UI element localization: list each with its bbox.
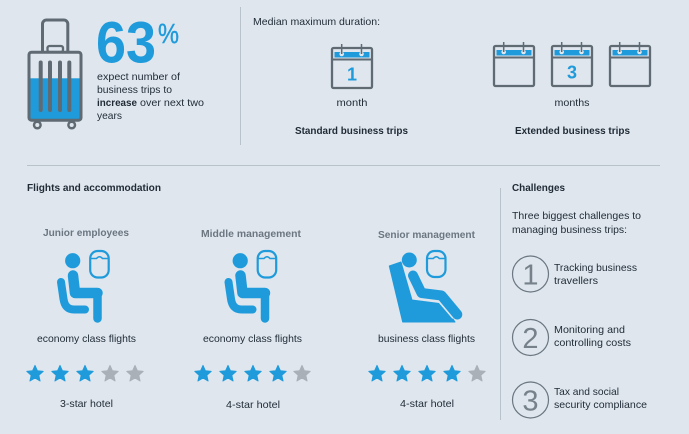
challenges heading: Challenges: [512, 182, 565, 194]
standard duration label: month: [336, 97, 368, 109]
challenge 1: Tracking business: [554, 262, 637, 274]
challenge 2: 2: [522, 323, 539, 355]
challenge 1: [512, 256, 637, 292]
statistic description: years: [97, 110, 122, 122]
challenge 2: controlling costs: [554, 337, 631, 349]
extended trips: calendars and labels: [494, 42, 650, 137]
challenge 2: Monitoring and: [554, 324, 625, 336]
senior flight class: business class flights: [378, 333, 475, 345]
junior flight class: economy class flights: [37, 333, 136, 345]
icon: business seat: [389, 251, 457, 322]
statistic description: over next two: [140, 97, 204, 109]
middle flight class: economy class flights: [203, 333, 302, 345]
challenges intro: managing business trips:: [512, 224, 627, 236]
extended duration label: months: [554, 97, 590, 109]
icon: economy seat: [61, 251, 109, 318]
column: senior management: [369, 229, 485, 410]
challenge 3: 3: [522, 386, 539, 418]
rating: three stars: [27, 365, 143, 381]
statistic description: increase: [97, 97, 137, 109]
duration heading: Median maximum duration:: [253, 16, 380, 28]
challenges intro: Three biggest challenges to: [512, 210, 641, 222]
junior hotel: 3-star hotel: [60, 398, 113, 410]
panel: median maximum duration: [253, 16, 650, 137]
standard trips label: Standard business trips: [295, 125, 408, 137]
middle hotel: 4-star hotel: [226, 399, 280, 411]
extended trips label: Extended business trips: [515, 125, 630, 137]
panel: 63 percent statistic: [29, 10, 207, 128]
panel: challenges: [512, 182, 647, 418]
challenge 1: travellers: [554, 275, 598, 287]
senior heading: Senior management: [378, 229, 475, 241]
icon: three calendars: [494, 42, 650, 86]
section heading: Flights and accommodation: [27, 182, 161, 194]
standard trips: calendar and labels: [295, 44, 408, 137]
icon: one-month calendar: 1: [347, 64, 357, 84]
panel: flights and accommodation: [27, 182, 485, 411]
icon: three calendars: 3: [567, 62, 577, 82]
big number 63%: %: [158, 18, 179, 49]
challenge 3: [512, 382, 647, 418]
challenge 3: security compliance: [554, 399, 647, 411]
icon: suitcase: [29, 20, 81, 128]
statistic description: expect number of: [97, 71, 180, 83]
big number 63%: 63: [96, 10, 156, 76]
icon: economy seat: [228, 251, 276, 318]
column: junior employees: [27, 227, 143, 410]
challenge 2: [512, 320, 631, 356]
senior hotel: 4-star hotel: [400, 398, 454, 410]
challenge 3: Tax and social: [554, 386, 619, 398]
rating: four stars: [195, 365, 310, 381]
middle heading: Middle management: [201, 228, 301, 240]
challenge 1: 1: [522, 260, 539, 292]
statistic description: business trips to: [97, 84, 172, 96]
rating: four stars: [369, 365, 485, 381]
junior heading: Junior employees: [43, 227, 129, 239]
column: middle management: [195, 228, 310, 411]
